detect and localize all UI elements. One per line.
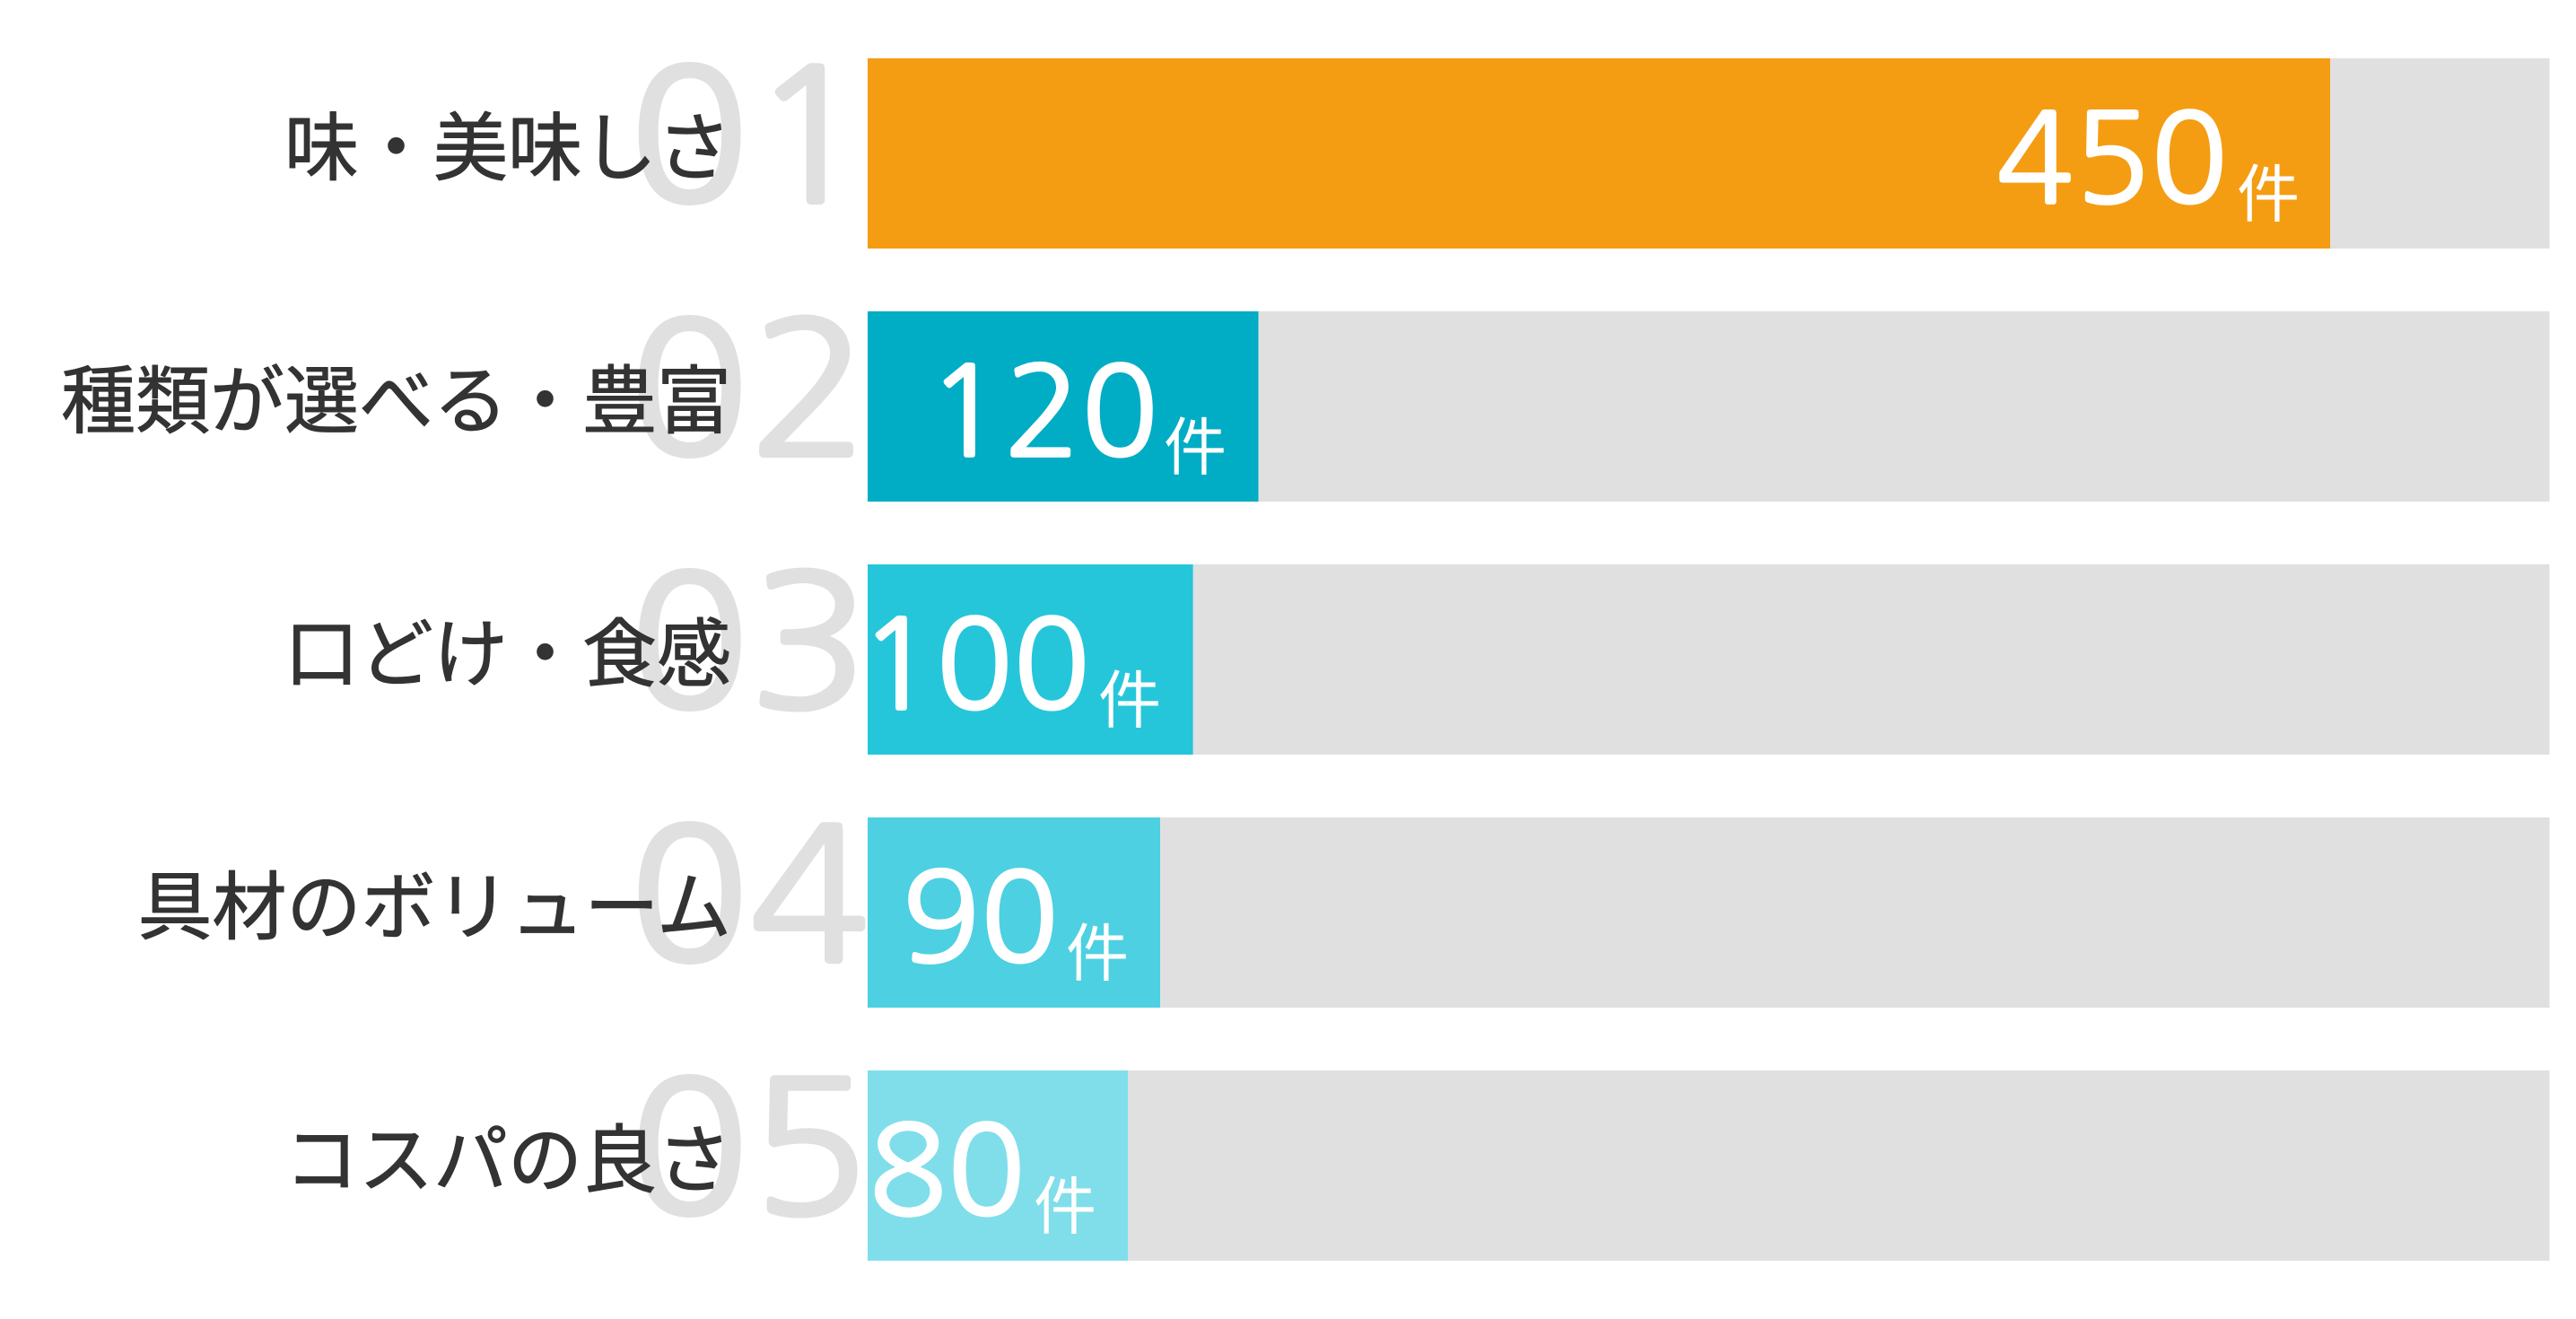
row 1: taste xyxy=(284,45,2550,249)
label: volume: 具材のボリューム xyxy=(137,866,731,949)
value 120: 120 xyxy=(927,350,1158,474)
bar fill: 100 xyxy=(868,564,1193,755)
unit: 件 xyxy=(1066,919,1129,989)
value 450: 450 xyxy=(1996,97,2228,221)
bar track xyxy=(868,817,2550,1008)
bar fill: 90 xyxy=(868,817,1160,1008)
row 3: texture xyxy=(284,551,2550,755)
rank number 01: 01 xyxy=(629,45,869,229)
rank number 04: 04 xyxy=(629,804,869,988)
label: taste: 味・美味しさ xyxy=(284,107,731,190)
bar fill: 450 xyxy=(868,58,2330,249)
rank number 02: 02 xyxy=(629,298,869,482)
row 5: value for money xyxy=(284,1057,2550,1261)
unit: 件 xyxy=(2237,160,2300,230)
rank number 05: 05 xyxy=(629,1057,869,1241)
value 100: 100 xyxy=(859,603,1090,727)
value 90: 90 xyxy=(902,856,1059,980)
bar fill: 120 xyxy=(868,311,1258,502)
unit: 件 xyxy=(1034,1172,1096,1242)
label: variety: 種類が選べる・豊富 xyxy=(61,360,731,443)
rank number 03: 03 xyxy=(629,551,869,735)
bar fill: 80 xyxy=(868,1070,1128,1261)
row 4: volume xyxy=(137,804,2550,1008)
label: value for money: コスパの良さ xyxy=(284,1119,731,1202)
bar track xyxy=(868,58,2550,249)
bar track xyxy=(868,564,2550,755)
unit: 件 xyxy=(1164,413,1227,483)
value 80: 80 xyxy=(869,1109,1026,1233)
bar track xyxy=(868,1070,2550,1261)
row 2: variety xyxy=(61,298,2550,502)
unit: 件 xyxy=(1098,666,1161,736)
bar track xyxy=(868,311,2550,502)
label: texture: 口どけ・食感 xyxy=(284,613,731,696)
